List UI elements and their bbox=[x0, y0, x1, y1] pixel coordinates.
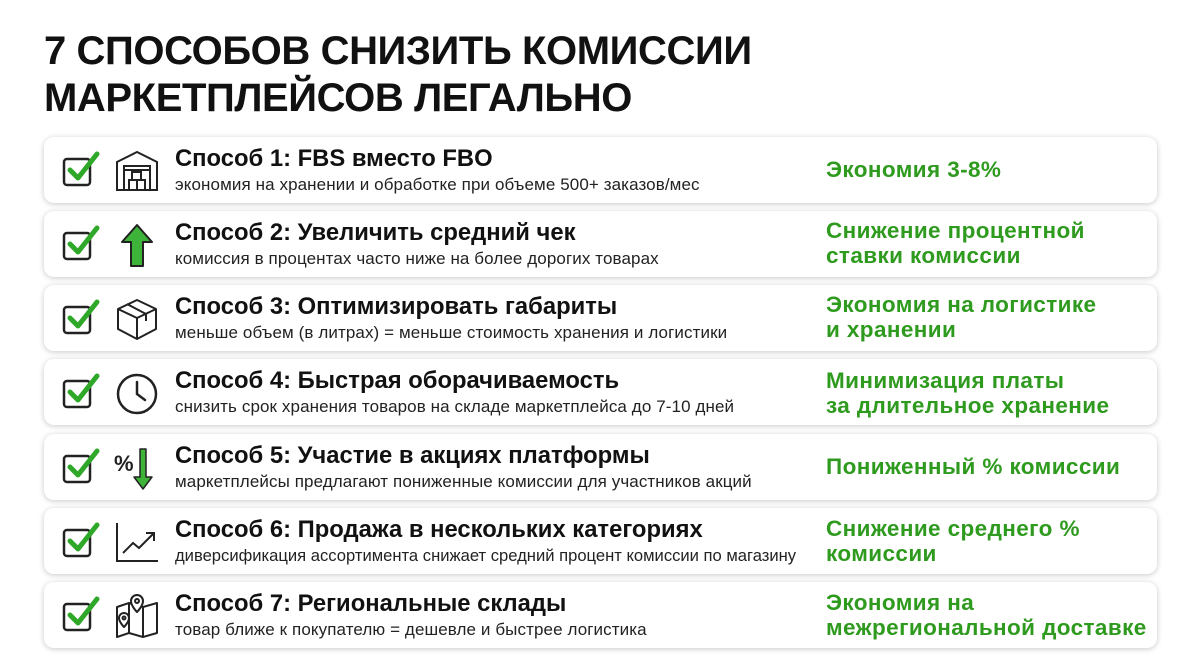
result: Снижение процентной bbox=[826, 218, 1085, 243]
icon: checkbox bbox=[62, 448, 100, 484]
icon: percent down bbox=[114, 448, 153, 490]
subtext: экономия на хранении и обработке при объеме 500+ заказов/мес bbox=[175, 175, 700, 194]
panel: way 1 bbox=[44, 137, 1157, 203]
icon: checkbox bbox=[62, 226, 100, 260]
result: и хранении bbox=[826, 317, 956, 342]
panel: way 4 bbox=[44, 359, 1157, 425]
heading: Способ 6: Продажа в нескольких категориях bbox=[175, 516, 703, 543]
title: 7 СПОСОБОВ СНИЗИТЬ КОМИССИИ bbox=[44, 29, 752, 73]
result: Минимизация платы bbox=[826, 368, 1064, 393]
subtext: меньше объем (в литрах) = меньше стоимость хранения и логистики bbox=[175, 323, 727, 342]
result bbox=[826, 590, 1147, 640]
result: межрегиональной доставке bbox=[826, 615, 1147, 640]
icon: checkbox bbox=[62, 374, 100, 408]
icon: checkbox bbox=[62, 522, 100, 558]
result: комиссии bbox=[826, 541, 937, 566]
icon: up arrow bbox=[121, 224, 153, 267]
icon: clock bbox=[116, 374, 158, 414]
panel: way 2 bbox=[44, 211, 1157, 277]
heading: Способ 5: Участие в акциях платформы bbox=[175, 442, 650, 469]
icon: percent down: % bbox=[114, 451, 134, 476]
result: Экономия на bbox=[826, 590, 974, 615]
subtext: комиссия в процентах часто ниже на более дорогих товарах bbox=[175, 249, 659, 268]
icon: map bbox=[116, 594, 158, 638]
subtext: диверсификация ассортимента снижает средний процент комиссии по магазину bbox=[175, 546, 796, 565]
result: за длительное хранение bbox=[826, 393, 1109, 418]
result: Пониженный % комиссии bbox=[826, 454, 1120, 479]
panel: way 6 bbox=[44, 508, 1157, 574]
result: Снижение среднего % bbox=[826, 516, 1080, 541]
icon: warehouse bbox=[116, 150, 158, 191]
panel: way 3 bbox=[44, 285, 1157, 351]
result: ставки комиссии bbox=[826, 243, 1021, 268]
panel: way 5 bbox=[44, 434, 1157, 500]
result bbox=[826, 516, 1080, 566]
heading: Способ 7: Региональные склады bbox=[175, 590, 566, 617]
subtext: товар ближе к покупателю = дешевле и быстрее логистика bbox=[175, 620, 647, 639]
title: МАРКЕТПЛЕЙСОВ ЛЕГАЛЬНО bbox=[44, 76, 632, 120]
result bbox=[826, 218, 1085, 268]
heading: Способ 1: FBS вместо FBO bbox=[175, 145, 493, 172]
title bbox=[44, 29, 752, 120]
heading: Способ 2: Увеличить средний чек bbox=[175, 219, 575, 246]
result bbox=[826, 368, 1109, 418]
heading: Способ 4: Быстрая оборачиваемость bbox=[175, 367, 619, 394]
heading: Способ 3: Оптимизировать габариты bbox=[175, 293, 617, 320]
result: Экономия на логистике bbox=[826, 292, 1096, 317]
panel: way 7 bbox=[44, 582, 1157, 648]
subtext: маркетплейсы предлагают пониженные комиссии для участников акций bbox=[175, 472, 752, 491]
result bbox=[826, 292, 1096, 342]
icon: checkbox bbox=[62, 300, 100, 334]
icon: growth chart bbox=[116, 523, 158, 562]
icon: box bbox=[117, 299, 157, 340]
subtext: снизить срок хранения товаров на складе маркетплейса до 7-10 дней bbox=[175, 397, 734, 416]
result: Экономия 3-8% bbox=[826, 157, 1001, 182]
icon: checkbox bbox=[62, 596, 100, 632]
icon: checkbox bbox=[62, 152, 100, 186]
